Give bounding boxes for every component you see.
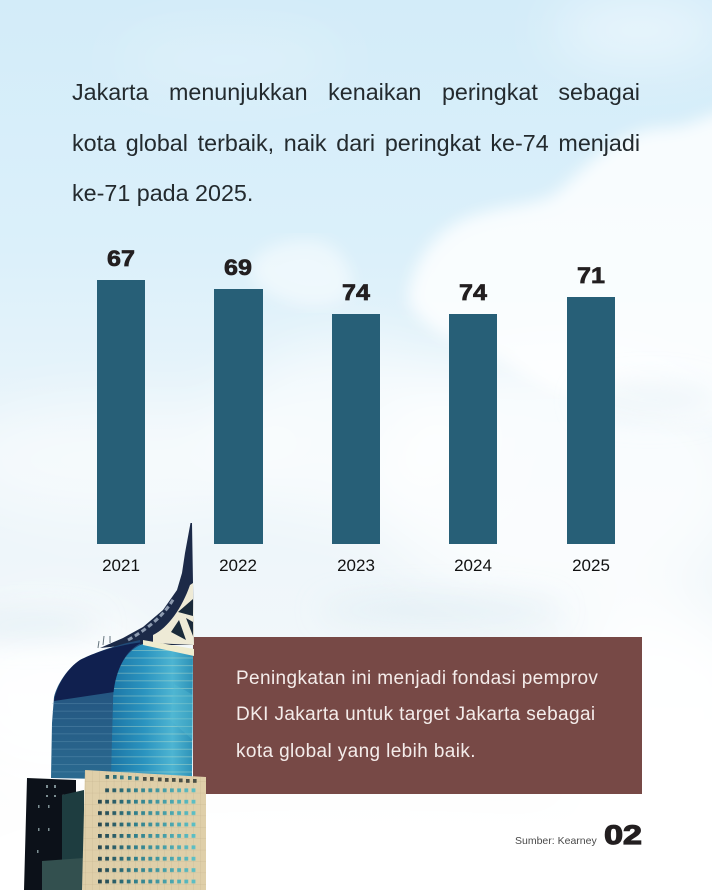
bar chart bbox=[97, 246, 615, 575]
callout panel: Peningkatan ini menjadi fondasi pemprov bbox=[236, 668, 598, 689]
x-axis year labels bbox=[102, 556, 610, 575]
x-axis year labels: 2022 bbox=[219, 556, 257, 575]
beige podium bbox=[82, 770, 206, 890]
bar 2022 bbox=[214, 255, 263, 544]
cornice strip bbox=[143, 640, 194, 656]
callout panel: DKI Jakarta untuk target Jakarta sebagai bbox=[236, 704, 596, 725]
headline text block: ke-71 pada 2025. bbox=[72, 180, 253, 206]
x-axis year labels: 2024 bbox=[454, 556, 492, 575]
callout panel: kota global yang lebih baik. bbox=[236, 741, 476, 762]
bar 2023 bbox=[332, 280, 380, 544]
x-axis year labels: 2025 bbox=[572, 556, 610, 575]
page number: 02 bbox=[604, 820, 642, 850]
source note: Sumber: Kearney bbox=[515, 835, 597, 847]
bar 2024 bbox=[449, 280, 497, 544]
headline text block: kota global terbaik, naik dari peringkat ke-74 menjadi bbox=[72, 130, 640, 156]
source and page number bbox=[515, 820, 642, 850]
headline text block: Jakarta menunjukkan kenaikan peringkat sebagai bbox=[72, 79, 640, 105]
illustration: Wisma 46 tower bbox=[24, 523, 206, 890]
x-axis year labels: 2021 bbox=[102, 556, 140, 575]
spire and truss bbox=[98, 523, 194, 648]
x-axis year labels: 2023 bbox=[337, 556, 375, 575]
black building bbox=[24, 778, 84, 890]
bar 2021: 67 bbox=[107, 246, 135, 271]
bar 2021 bbox=[97, 246, 145, 544]
bar 2024: 74 bbox=[459, 280, 487, 305]
dark tower side bbox=[51, 640, 150, 780]
main cloud mass bbox=[408, 110, 712, 422]
dark tower cap bbox=[54, 642, 143, 701]
floor lines bbox=[111, 644, 193, 778]
bar 2022: 69 bbox=[224, 255, 252, 280]
headline text block bbox=[72, 79, 640, 206]
bar 2025: 71 bbox=[577, 263, 605, 288]
callout panel bbox=[193, 637, 642, 794]
cyan tower face bbox=[111, 644, 193, 778]
bar 2025 bbox=[567, 263, 615, 544]
bar 2023: 74 bbox=[342, 280, 370, 305]
